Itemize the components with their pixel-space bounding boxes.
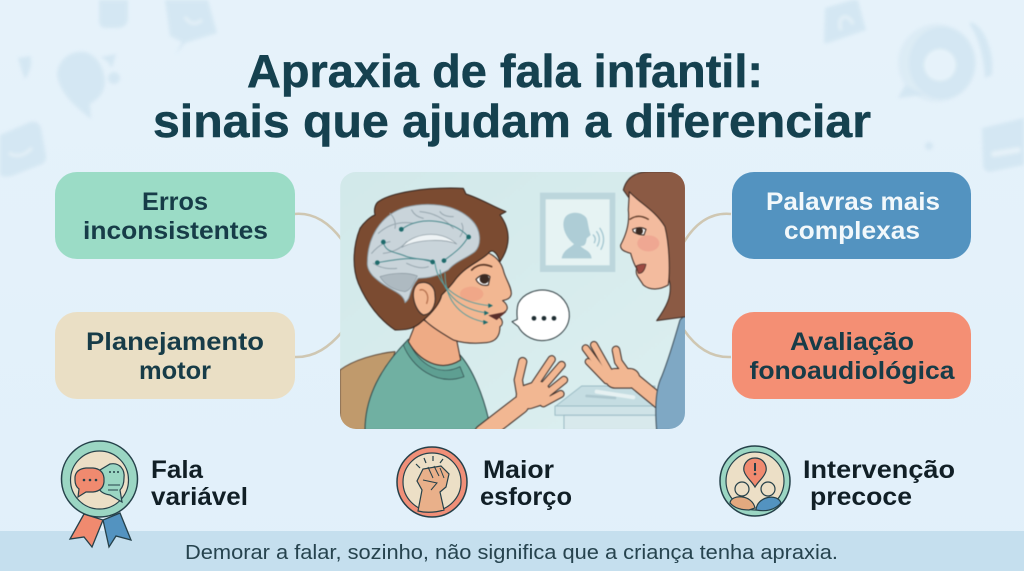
card: erros inconsistentes	[55, 172, 295, 259]
woman arm and hand	[586, 345, 662, 403]
card: avaliação fonoaudiológica	[732, 312, 971, 399]
card: avaliação fonoaudiológica: Avaliação	[790, 328, 914, 356]
speech bubble	[512, 290, 569, 341]
footer note: Demorar a falar, sozinho, não significa que a criança tenha apraxia.	[185, 542, 838, 564]
card: palavras mais complexas	[732, 172, 971, 259]
card: avaliação fonoaudiológica: fonoaudiológica	[750, 357, 956, 385]
connectors	[294, 214, 731, 357]
central illustration	[340, 170, 687, 433]
neural paths to mouth	[435, 263, 490, 322]
boy arm and hand	[483, 359, 564, 433]
card: palavras mais complexas: Palavras mais	[766, 188, 940, 216]
label: maior esforço: Maior	[483, 456, 554, 484]
label: intervenção precoce: precoce	[810, 483, 912, 511]
icon: fist	[397, 447, 467, 517]
card: planejamento motor: Planejamento	[86, 328, 264, 356]
background speech icons	[0, 0, 1024, 177]
card: erros inconsistentes: Erros	[142, 188, 208, 216]
boy shirt	[365, 339, 488, 430]
boy neck and face	[408, 317, 461, 365]
title: Apraxia de fala infantil:	[247, 45, 763, 97]
label: fala variável: variável	[151, 483, 248, 511]
label: maior esforço	[480, 456, 572, 511]
label: fala variável	[151, 456, 248, 511]
title	[153, 45, 871, 147]
card: erros inconsistentes: inconsistentes	[83, 217, 268, 245]
woman face	[621, 192, 669, 289]
card: planejamento motor: motor	[139, 357, 211, 385]
icon: medal with speech bubbles	[62, 441, 138, 547]
boy eye	[472, 265, 492, 285]
footer note	[0, 531, 1024, 571]
boy hair	[354, 188, 508, 330]
label: intervenção precoce	[803, 456, 955, 511]
icon: early intervention	[720, 446, 790, 516]
desk	[555, 386, 657, 430]
card: palavras mais complexas: complexas	[784, 217, 920, 245]
woman top	[656, 313, 687, 430]
title: sinais que ajudam a diferenciar	[153, 95, 871, 147]
woman hair back	[623, 172, 687, 321]
label: fala variável: Fala	[151, 456, 204, 484]
chair	[340, 352, 395, 430]
boy brain	[367, 204, 480, 303]
card: planejamento motor	[55, 312, 295, 399]
label: maior esforço: esforço	[480, 483, 572, 511]
boy ear	[413, 282, 435, 315]
label: intervenção precoce: Intervenção	[803, 456, 955, 484]
picture frame	[540, 193, 615, 272]
